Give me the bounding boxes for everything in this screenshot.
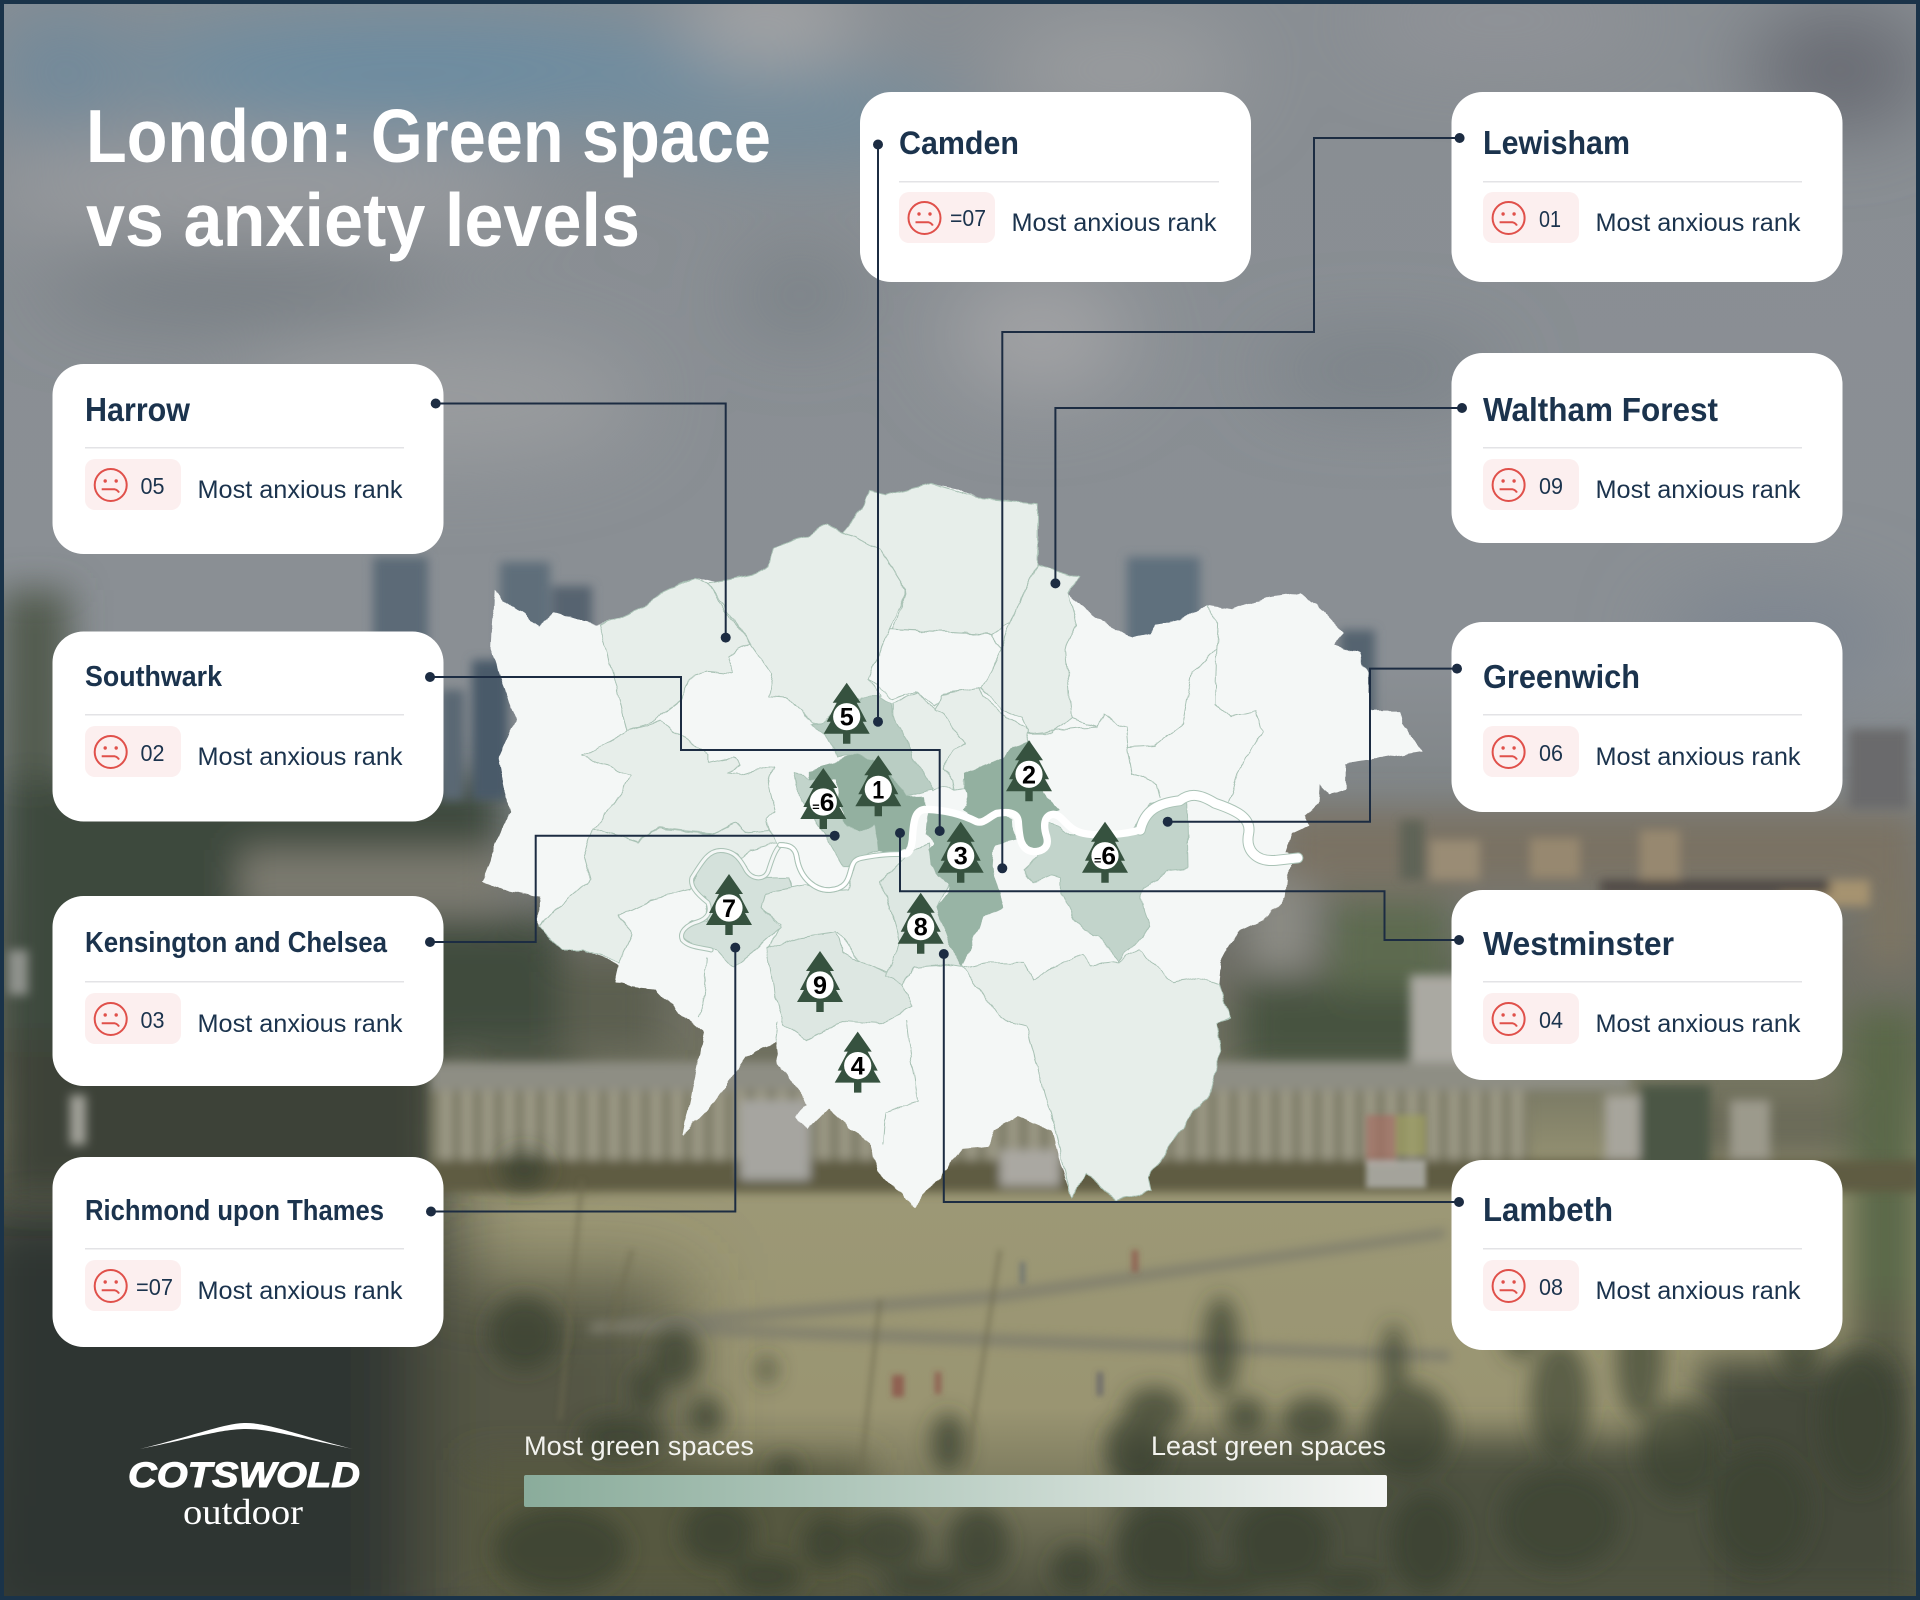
panel: Lambeth: Lambeth: [1483, 1191, 1613, 1228]
panel: Harrow: [52, 364, 444, 554]
panel: Southwark: 02: [140, 740, 164, 766]
panel: Lambeth: Most anxious rank: [1596, 1277, 1801, 1305]
borough: Hackney: [935, 688, 1030, 792]
panel: Waltham Forest: [1452, 353, 1842, 543]
panel: Harrow: Most anxious rank: [198, 476, 403, 504]
borough: Richmond upon Thames: [681, 850, 791, 967]
panel: Greenwich: Most anxious rank: [1596, 743, 1801, 771]
distant towers: [373, 557, 428, 647]
panel: Camden: Camden: [899, 125, 1019, 161]
borough: Hounslow: [539, 823, 778, 962]
town blocks: [1530, 838, 1580, 878]
panel: Lambeth: [1452, 1160, 1842, 1350]
title: London: Green space: [86, 94, 771, 178]
tree marker 5: [824, 683, 870, 744]
borough: Bromley: [963, 950, 1230, 1201]
connector: Southwark: [425, 672, 945, 836]
colourful sign: [1366, 1115, 1396, 1165]
borough: Merton: [767, 932, 912, 1039]
left trees and dark foreground: [0, 590, 70, 800]
panel: Lewisham: [1452, 92, 1842, 282]
panel: Richmond upon Thames: Most anxious rank: [198, 1277, 403, 1305]
river Thames: [682, 795, 1298, 950]
field paths: [590, 1228, 1445, 1334]
borough: Haringey: [869, 629, 1001, 706]
map: London boroughs shaded by green space: [481, 483, 1422, 1207]
panel: Lambeth: 08: [1539, 1274, 1563, 1300]
foliage in foreground: [488, 1150, 1900, 1596]
borough: Barnet: [708, 524, 906, 724]
monument columns: [1410, 975, 1470, 1085]
legend: green space scale: [524, 1431, 1387, 1507]
tree marker 8: [898, 893, 944, 954]
right town and trees: [1280, 810, 1920, 890]
panel: Harrow: Harrow: [85, 391, 190, 428]
tree marker 7: [706, 874, 752, 935]
logo: Cotswold Outdoor: outdoor: [183, 1492, 303, 1532]
logo: Cotswold Outdoor: [128, 1423, 360, 1532]
tree marker =6 Greenwich: =6: [1094, 843, 1116, 871]
panel: Westminster: Westminster: [1483, 925, 1674, 962]
tree marker 1: [855, 755, 901, 816]
borough: Westminster: [808, 755, 927, 853]
tree marker 3: [938, 822, 984, 883]
panel: Waltham Forest: Most anxious rank: [1596, 476, 1801, 504]
panel: Southwark: Southwark: [85, 661, 223, 693]
tree marker 8: 8: [914, 914, 928, 942]
panel: Camden: Most anxious rank: [1012, 209, 1217, 237]
borough: Enfield: [843, 483, 1038, 634]
panel: Greenwich: 06: [1539, 740, 1563, 766]
tree marker 1: 1: [872, 776, 884, 804]
tree marker 4: [835, 1032, 881, 1093]
borough: Kensington and Chelsea: [795, 774, 878, 867]
connector: Waltham Forest: [1050, 403, 1467, 588]
tree marker 9: 9: [813, 972, 827, 1000]
connector: Lewisham: [997, 133, 1465, 873]
tree marker =6 Greenwich: [1082, 822, 1128, 883]
tree marker 4: 4: [851, 1053, 865, 1081]
legend: green space scale: Least green spaces: [1151, 1431, 1386, 1461]
borough: Ealing: [582, 721, 775, 842]
borough: Lambeth: [880, 843, 963, 985]
panel: Kensington and Chelsea: [52, 896, 444, 1086]
connector: Greenwich: [1163, 664, 1462, 827]
panel: Lewisham: Most anxious rank: [1596, 209, 1801, 237]
borough: Greenwich: [1024, 802, 1188, 961]
inner London boroughs: [795, 688, 1060, 967]
borough: Southwark: [927, 812, 1015, 967]
connector: Lambeth: [939, 949, 1464, 1207]
panel: Kensington and Chelsea: Kensington and Chelsea: [85, 927, 388, 959]
panel: Southwark: [52, 632, 444, 822]
panel: Camden: [860, 92, 1251, 282]
panel: Westminster: Most anxious rank: [1596, 1010, 1801, 1038]
panel: Waltham Forest: Waltham Forest: [1483, 391, 1718, 428]
tree marker =6 Kensington: =6: [812, 789, 834, 817]
panel: Kensington and Chelsea: Most anxious rank: [198, 1010, 403, 1038]
panel: Richmond upon Thames: =07: [136, 1274, 173, 1300]
tree marker =6 Kensington: [800, 768, 846, 829]
connector: Harrow: [431, 398, 731, 643]
panel: Greenwich: [1452, 622, 1842, 812]
tree marker 2: [1006, 740, 1052, 801]
borough: Tower Hamlets: [963, 740, 1060, 850]
panel: Greenwich: Greenwich: [1483, 658, 1640, 695]
tree marker 3: 3: [954, 843, 968, 871]
logo: Cotswold Outdoor: COTSWOLD: [128, 1456, 360, 1495]
panel: Lewisham: 01: [1539, 206, 1561, 232]
panel: Camden: =07: [950, 205, 986, 231]
borough: Waltham Forest area: [982, 564, 1078, 734]
people in the field: [1132, 1250, 1138, 1272]
panel: Richmond upon Thames: Richmond upon Thames: [85, 1195, 384, 1227]
connector: Richmond upon Thames: [426, 943, 740, 1216]
tree marker 7: 7: [722, 895, 736, 923]
panel: Harrow: 05: [140, 473, 164, 499]
borough: Islington: [893, 692, 965, 792]
legend: green space scale: Most green spaces: [524, 1431, 754, 1461]
tree marker 9: [797, 951, 843, 1012]
panel: Lewisham: Lewisham: [1483, 124, 1630, 161]
tree marker 5: 5: [840, 704, 854, 732]
connector: Camden: [873, 140, 883, 727]
colonnade strip: [430, 1062, 1630, 1090]
panel: Westminster: [1452, 890, 1842, 1080]
panel: Southwark: Most anxious rank: [198, 743, 403, 771]
borough boundaries: east London: [698, 605, 1263, 1144]
panel: Waltham Forest: 09: [1539, 473, 1563, 499]
panel: Kensington and Chelsea: 03: [140, 1007, 164, 1033]
borough: Wandsworth: [762, 853, 909, 972]
title: vs anxiety levels: [86, 178, 640, 262]
panel: Westminster: 04: [1539, 1007, 1563, 1033]
tree marker 2: 2: [1022, 761, 1036, 789]
connector lines and dots: [425, 133, 1467, 1216]
connector: Westminster: [895, 828, 1464, 945]
London outline: [481, 483, 1422, 1207]
London boroughs: [481, 483, 1422, 1207]
borough: Camden: [812, 697, 933, 797]
borough: Harrow: [599, 577, 751, 731]
connector: Kensington and Chelsea: [425, 831, 840, 947]
panel: Richmond upon Thames: [52, 1157, 444, 1347]
